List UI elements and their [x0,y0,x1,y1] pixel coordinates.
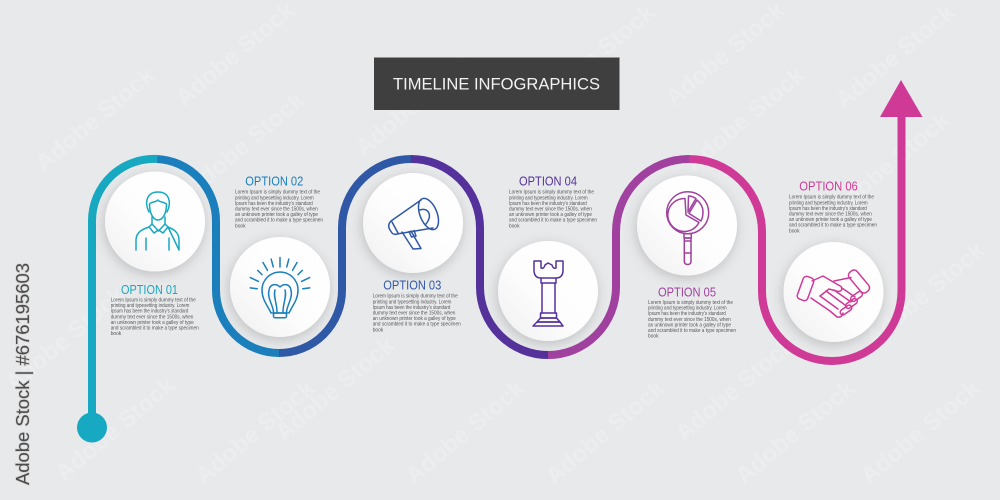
body text: Ipsum has been the industry's standard [509,201,587,207]
watermark: Adobe Stock pattern: Adobe Stock [190,374,321,490]
body text: book [111,331,122,337]
watermark: Adobe Stock pattern: Adobe Stock [855,374,986,490]
body text: an unknown printer took a galley of type [111,320,194,326]
icon: light bulb [250,258,310,318]
body text: and scrambled it to make a type specimen [648,328,736,334]
icon: magnifier with pie chart [667,192,709,264]
body text: printing and typesetting industry. Lorem [789,200,868,206]
body text: Ipsum has been the industry's standard [789,206,867,212]
watermark: Adobe Stock pattern: Adobe Stock [50,371,181,487]
panel: option 06 [784,179,884,342]
body text: Ipsum has been the industry's standard [373,305,451,311]
watermark: Adobe Stock pattern: Adobe Stock [400,374,531,490]
body text: printing and typesetting industry. Lorem [111,303,189,309]
body text: Lorem Ipsum is simply dummy text of the [648,300,733,306]
watermark: Adobe Stock pattern: Adobe Stock [540,374,671,490]
heading: OPTION 05 [658,285,716,300]
body text: and scrambled it to make a type specimen [235,218,323,224]
timeline path with arrow [77,80,922,442]
body text [648,300,736,340]
icon: person [136,192,179,250]
watermark: Adobe Stock pattern: Adobe Stock [730,374,861,490]
watermark: Adobe Stock pattern: Adobe Stock [170,0,301,112]
body text [373,294,461,333]
body text: dummy text ever since the 1500s, when [373,311,456,317]
body text: dummy text ever since the 1500s, when [111,314,194,320]
body text: book [373,327,384,333]
body text: printing and typesetting industry. Lorem [648,306,727,312]
body text: dummy text ever since the 1500s, when [235,206,318,212]
circle [637,176,737,276]
circle [498,241,598,341]
body text: printing and typesetting industry. Lorem [373,299,451,305]
panel: option 05 [637,176,737,340]
body text: an unknown printer took a galley of type [235,212,318,218]
body text [509,190,597,229]
body text: printing and typesetting industry. Lorem [235,195,314,201]
icon: handshake [796,268,871,317]
body text: an unknown printer took a galley of type [509,212,592,218]
circle [363,173,463,273]
body text: an unknown printer took a galley of type [789,217,872,223]
body text: Ipsum has been the industry's standard [111,309,189,315]
watermark: Adobe Stock pattern: Adobe Stock [350,46,481,162]
heading: OPTION 01 [121,282,178,297]
heading: OPTION 02 [245,174,303,189]
body text: Lorem Ipsum is simply dummy text of the [789,195,874,201]
body text: an unknown printer took a galley of type [373,316,456,322]
body text: Lorem Ipsum is simply dummy text of the [373,294,458,300]
body text [235,190,323,229]
icon: megaphone [389,196,443,249]
body text: dummy text ever since the 1500s, when [789,211,872,217]
panel: option 02 [230,174,330,337]
heading: OPTION 03 [383,277,441,292]
body text: printing and typesetting industry. Lorem [509,195,588,201]
panel: option 01 [105,172,205,337]
watermark: Adobe Stock pattern: Adobe Stock [825,106,956,222]
body text: Ipsum has been the industry's standard [235,201,313,207]
body text: and scrambled it to make a type specimen [789,223,877,229]
circle [105,172,205,272]
body text: Lorem Ipsum is simply dummy text of the [235,190,320,196]
body text: book [235,223,246,229]
body text: and scrambled it to make a type specimen [509,218,597,224]
body text: dummy text ever since the 1500s, when [648,317,731,323]
body text: Lorem Ipsum is simply dummy text of the [111,298,196,304]
body text: Lorem Ipsum is simply dummy text of the [509,190,594,196]
watermark: Adobe Stock pattern: Adobe Stock [830,0,961,114]
watermark: Adobe Stock pattern: Adobe Stock [180,86,311,202]
body text: an unknown printer took a galley of type [648,322,731,328]
body text: and scrambled it to make a type specimen [373,322,461,328]
watermark: Adobe Stock pattern: Adobe Stock [660,0,791,112]
body text [789,195,877,234]
watermark: Adobe Stock pattern: Adobe Stock [680,61,811,177]
icon: chess rook [533,261,563,326]
arrow head [880,80,922,117]
circle [230,237,330,337]
heading: OPTION 06 [799,179,858,194]
body text: book [648,334,659,340]
panel: option 04 [498,174,598,341]
watermark: Adobe Stock pattern: Adobe Stock [860,236,991,352]
body text: book [509,223,520,229]
watermark: Adobe Stock pattern: Adobe Stock [670,331,801,447]
circle [784,242,884,342]
watermark: Adobe Stock pattern: Adobe Stock [30,61,161,177]
body text: and scrambled it to make a type specimen [111,326,199,332]
watermark: Adobe Stock pattern: Adobe Stock [0,281,131,397]
body text: dummy text ever since the 1500s, when [509,206,592,212]
start dot [77,412,107,442]
body text [111,298,199,337]
watermark: Adobe Stock pattern: Adobe Stock [270,331,401,447]
panel: option 03 [363,173,463,333]
body text: book [789,228,800,234]
title box: TIMELINE INFOGRAPHICS [393,75,600,93]
body text: Ipsum has been the industry's standard [648,311,726,317]
title box [374,58,620,110]
watermark: Adobe Stock pattern: Adobe Stock [530,0,661,114]
heading: OPTION 04 [519,174,577,189]
side credit text: Adobe Stock | #676195603 [13,263,33,485]
